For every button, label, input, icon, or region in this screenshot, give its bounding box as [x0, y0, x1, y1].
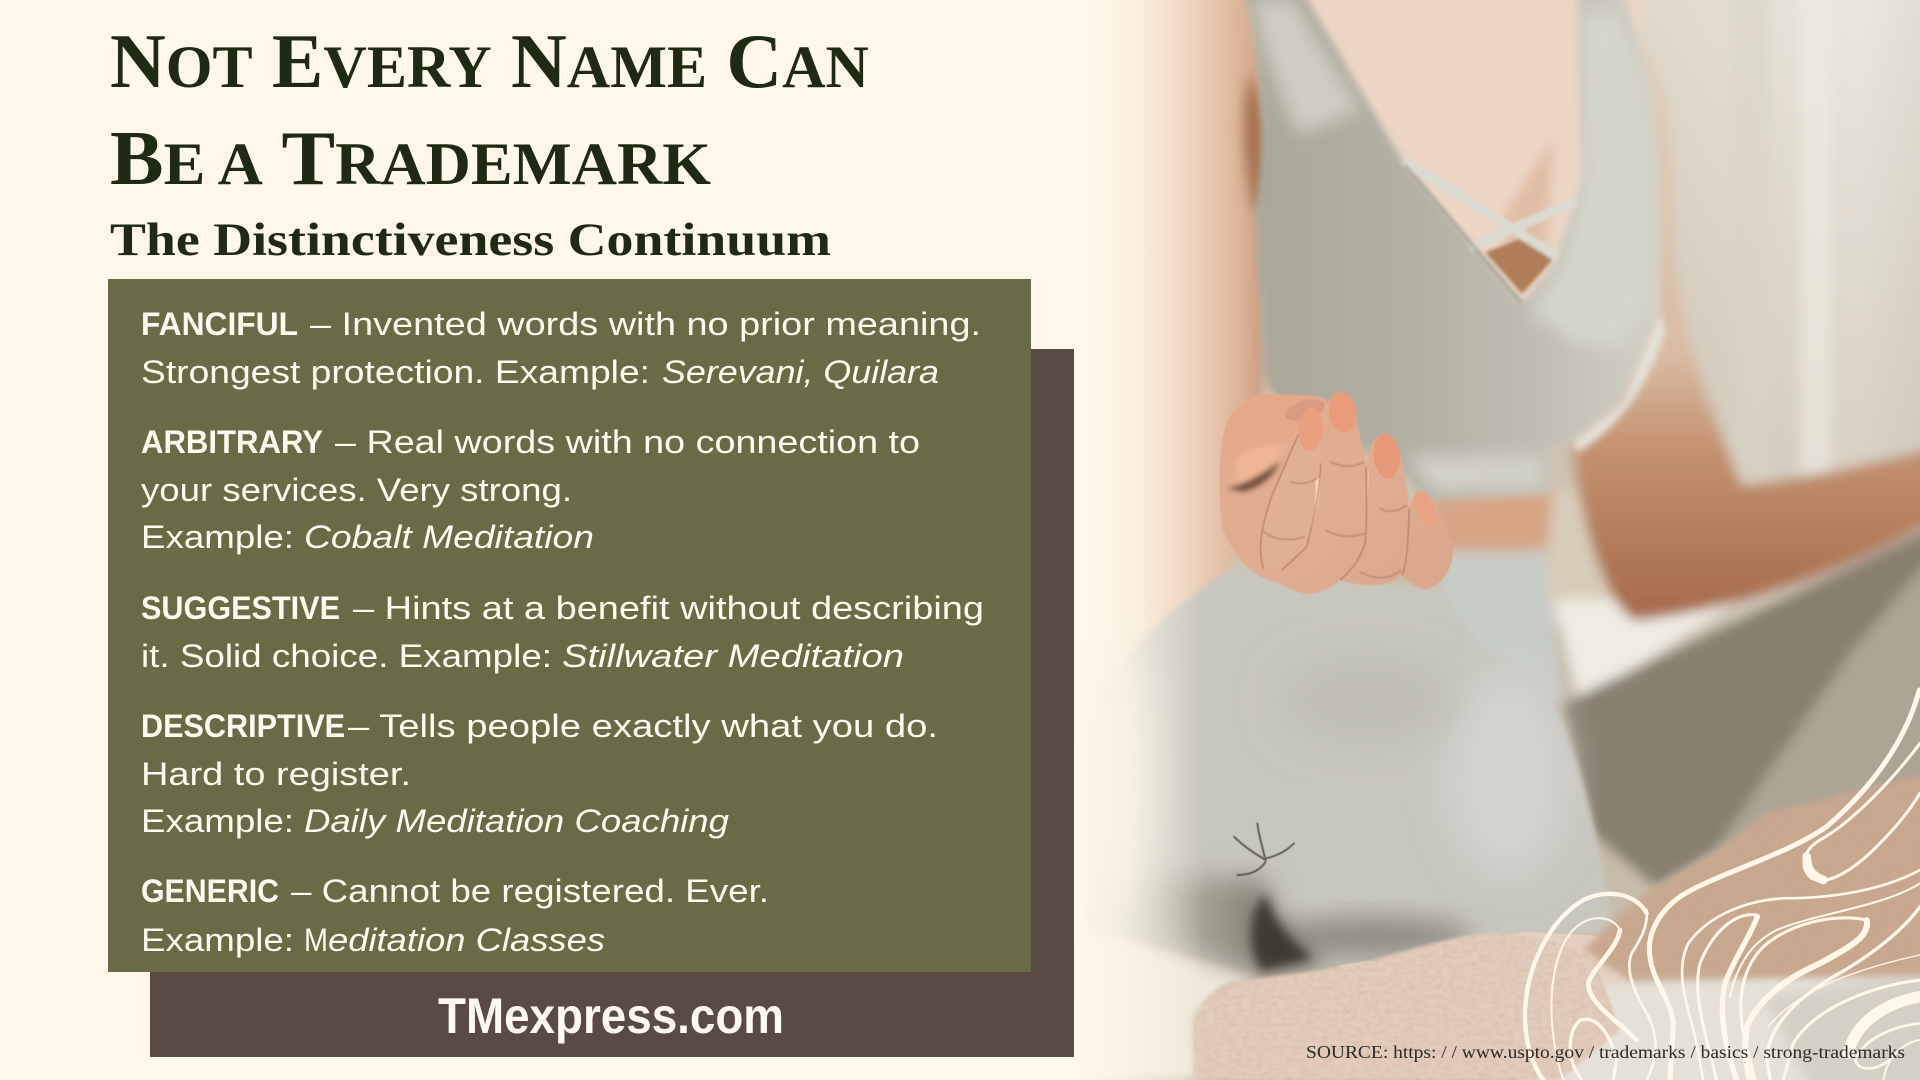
entry: fanciful	[141, 306, 981, 390]
entry: fanciful: Strongest protection. Example:	[141, 354, 650, 390]
entry: generic: M	[304, 922, 328, 958]
photo: meditating woman	[1100, 0, 1920, 1080]
entry: suggestive: it. Solid choice. Example:	[141, 638, 552, 674]
olive content panel	[108, 279, 1031, 972]
entry: descriptive: Daily Meditation Coaching	[304, 803, 729, 839]
entry: arbitrary: – Real words with no connection to	[335, 424, 920, 460]
entry: descriptive: DESCRIPTIVE	[141, 708, 345, 744]
entry: generic: Example:	[141, 922, 294, 958]
entry: descriptive	[141, 708, 938, 839]
entry: descriptive: Hard to register.	[141, 756, 411, 792]
entry: arbitrary: your services. Very strong.	[141, 472, 572, 508]
brown backing panel	[150, 349, 1074, 1057]
website url: TMexpress.com	[438, 988, 784, 1044]
entry: arbitrary: Example:	[141, 519, 294, 555]
title: BE A TRADEMARK	[110, 115, 711, 201]
entry: fanciful: FANCIFUL	[141, 306, 298, 342]
entry: arbitrary	[141, 424, 920, 555]
subtitle: The Distinctiveness Continuum	[110, 214, 831, 266]
entry: fanciful: – Invented words with no prior meaning.	[310, 306, 981, 342]
entry: descriptive: – Tells people exactly what you do.	[348, 708, 938, 744]
entry: generic: – Cannot be registered. Ever.	[291, 873, 769, 909]
entry: suggestive: – Hints at a benefit without describing	[353, 590, 984, 626]
source line: SOURCE: https: / / www.uspto.gov / trademarks / basics / strong-trademarks	[1306, 1042, 1905, 1062]
entry: arbitrary: ARBITRARY	[141, 424, 323, 460]
entry: suggestive: Stillwater Meditation	[562, 638, 904, 674]
entry: suggestive	[141, 590, 984, 674]
entry: generic	[141, 873, 769, 958]
decorative cream swirl lines	[1525, 690, 1920, 1080]
title	[110, 18, 869, 201]
entry: descriptive: Example:	[141, 803, 294, 839]
entry: generic: GENERIC	[141, 873, 279, 909]
title: NOT EVERY NAME CAN	[110, 18, 869, 104]
entry: arbitrary: Cobalt Meditation	[304, 519, 594, 555]
entry: suggestive: SUGGESTIVE	[141, 590, 340, 626]
entry: fanciful: Serevani, Quilara	[662, 354, 939, 390]
entry: generic: editation Classes	[328, 922, 605, 958]
